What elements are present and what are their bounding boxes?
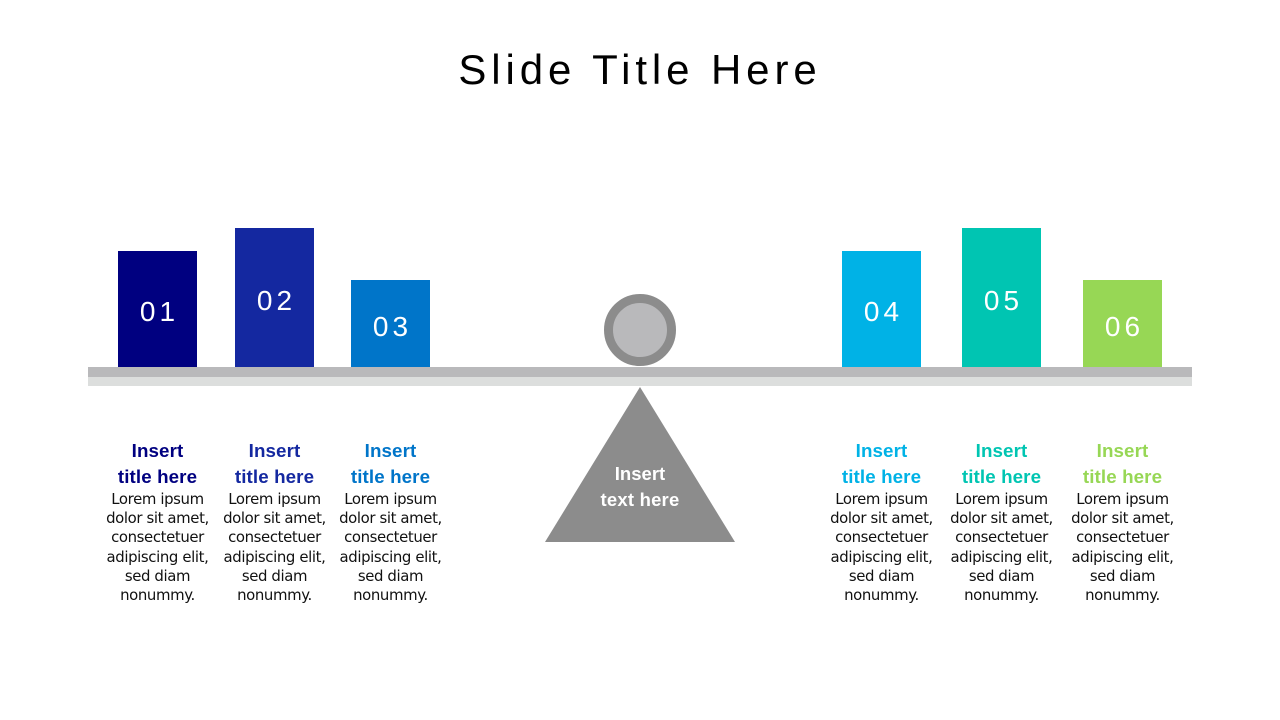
text column 03: dolor sit amet,: [339, 509, 442, 527]
text column 04: adipiscing elit,: [831, 548, 932, 566]
text column 05: Lorem ipsum: [955, 490, 1048, 508]
bar 05: [962, 228, 1041, 367]
text column 01: title here: [118, 466, 197, 486]
bar 02: 02: [257, 285, 296, 316]
bar 03: 03: [373, 311, 412, 342]
text column 03: Lorem ipsum: [344, 490, 437, 508]
text column 06: title here: [1083, 466, 1162, 486]
text column 06: Lorem ipsum: [1076, 490, 1169, 508]
text column 06: [1071, 440, 1174, 604]
text column 03: consectetuer: [344, 528, 437, 546]
seesaw beam: [88, 367, 1192, 386]
text column 03: nonummy.: [353, 586, 428, 604]
bar 03: [351, 280, 430, 367]
text column 02: Lorem ipsum: [228, 490, 321, 508]
text column 04: Lorem ipsum: [835, 490, 928, 508]
text column 04: nonummy.: [844, 586, 919, 604]
text column 02: nonummy.: [237, 586, 312, 604]
text column 05: [950, 440, 1053, 604]
fulcrum triangle with text: [545, 387, 735, 542]
text column 04: [830, 440, 933, 604]
text column 06: consectetuer: [1076, 528, 1169, 546]
text column 01: dolor sit amet,: [106, 509, 209, 527]
text column 02: sed diam: [242, 567, 307, 585]
bar 06: 06: [1105, 311, 1144, 342]
text column 04: sed diam: [849, 567, 914, 585]
text column 05: sed diam: [969, 567, 1034, 585]
text column 02: Insert: [249, 440, 300, 460]
text column 03: sed diam: [358, 567, 423, 585]
text column 02: adipiscing elit,: [224, 548, 325, 566]
text column 03: title here: [351, 466, 430, 486]
text column 03: adipiscing elit,: [340, 548, 441, 566]
text column 04: Insert: [856, 440, 907, 460]
text column 01: Insert: [132, 440, 183, 460]
text column 01: Lorem ipsum: [111, 490, 204, 508]
text column 05: Insert: [976, 440, 1027, 460]
bar 01: [118, 251, 197, 367]
text column 06: Insert: [1097, 440, 1148, 460]
bar 01: 01: [140, 296, 179, 327]
text column 01: nonummy.: [120, 586, 195, 604]
text column 06: dolor sit amet,: [1071, 509, 1174, 527]
text column 06: adipiscing elit,: [1072, 548, 1173, 566]
fulcrum triangle with text: Insert: [615, 463, 665, 484]
text column 04: consectetuer: [835, 528, 928, 546]
text column 02: [223, 440, 326, 604]
text column 01: consectetuer: [111, 528, 204, 546]
text column 05: title here: [962, 466, 1041, 486]
text column 05: consectetuer: [955, 528, 1048, 546]
text column 03: [339, 440, 442, 604]
bar 05: 05: [984, 285, 1023, 316]
text column 06: nonummy.: [1085, 586, 1160, 604]
icon: fulcrum ball: [604, 294, 676, 366]
text column 05: dolor sit amet,: [950, 509, 1053, 527]
text column 02: title here: [235, 466, 314, 486]
text column 01: [106, 440, 209, 604]
text column 01: adipiscing elit,: [107, 548, 208, 566]
bar 06: [1083, 280, 1162, 367]
text column 06: sed diam: [1090, 567, 1155, 585]
text column 01: sed diam: [125, 567, 190, 585]
title: Slide Title Here: [458, 46, 822, 93]
text column 04: title here: [842, 466, 921, 486]
bar 04: [842, 251, 921, 367]
text column 02: consectetuer: [228, 528, 321, 546]
bar 04: 04: [864, 296, 903, 327]
text column 05: nonummy.: [964, 586, 1039, 604]
text column 03: Insert: [365, 440, 416, 460]
text column 04: dolor sit amet,: [830, 509, 933, 527]
fulcrum triangle with text: text here: [601, 489, 679, 510]
bar 02: [235, 228, 314, 367]
text column 02: dolor sit amet,: [223, 509, 326, 527]
text column 05: adipiscing elit,: [951, 548, 1052, 566]
